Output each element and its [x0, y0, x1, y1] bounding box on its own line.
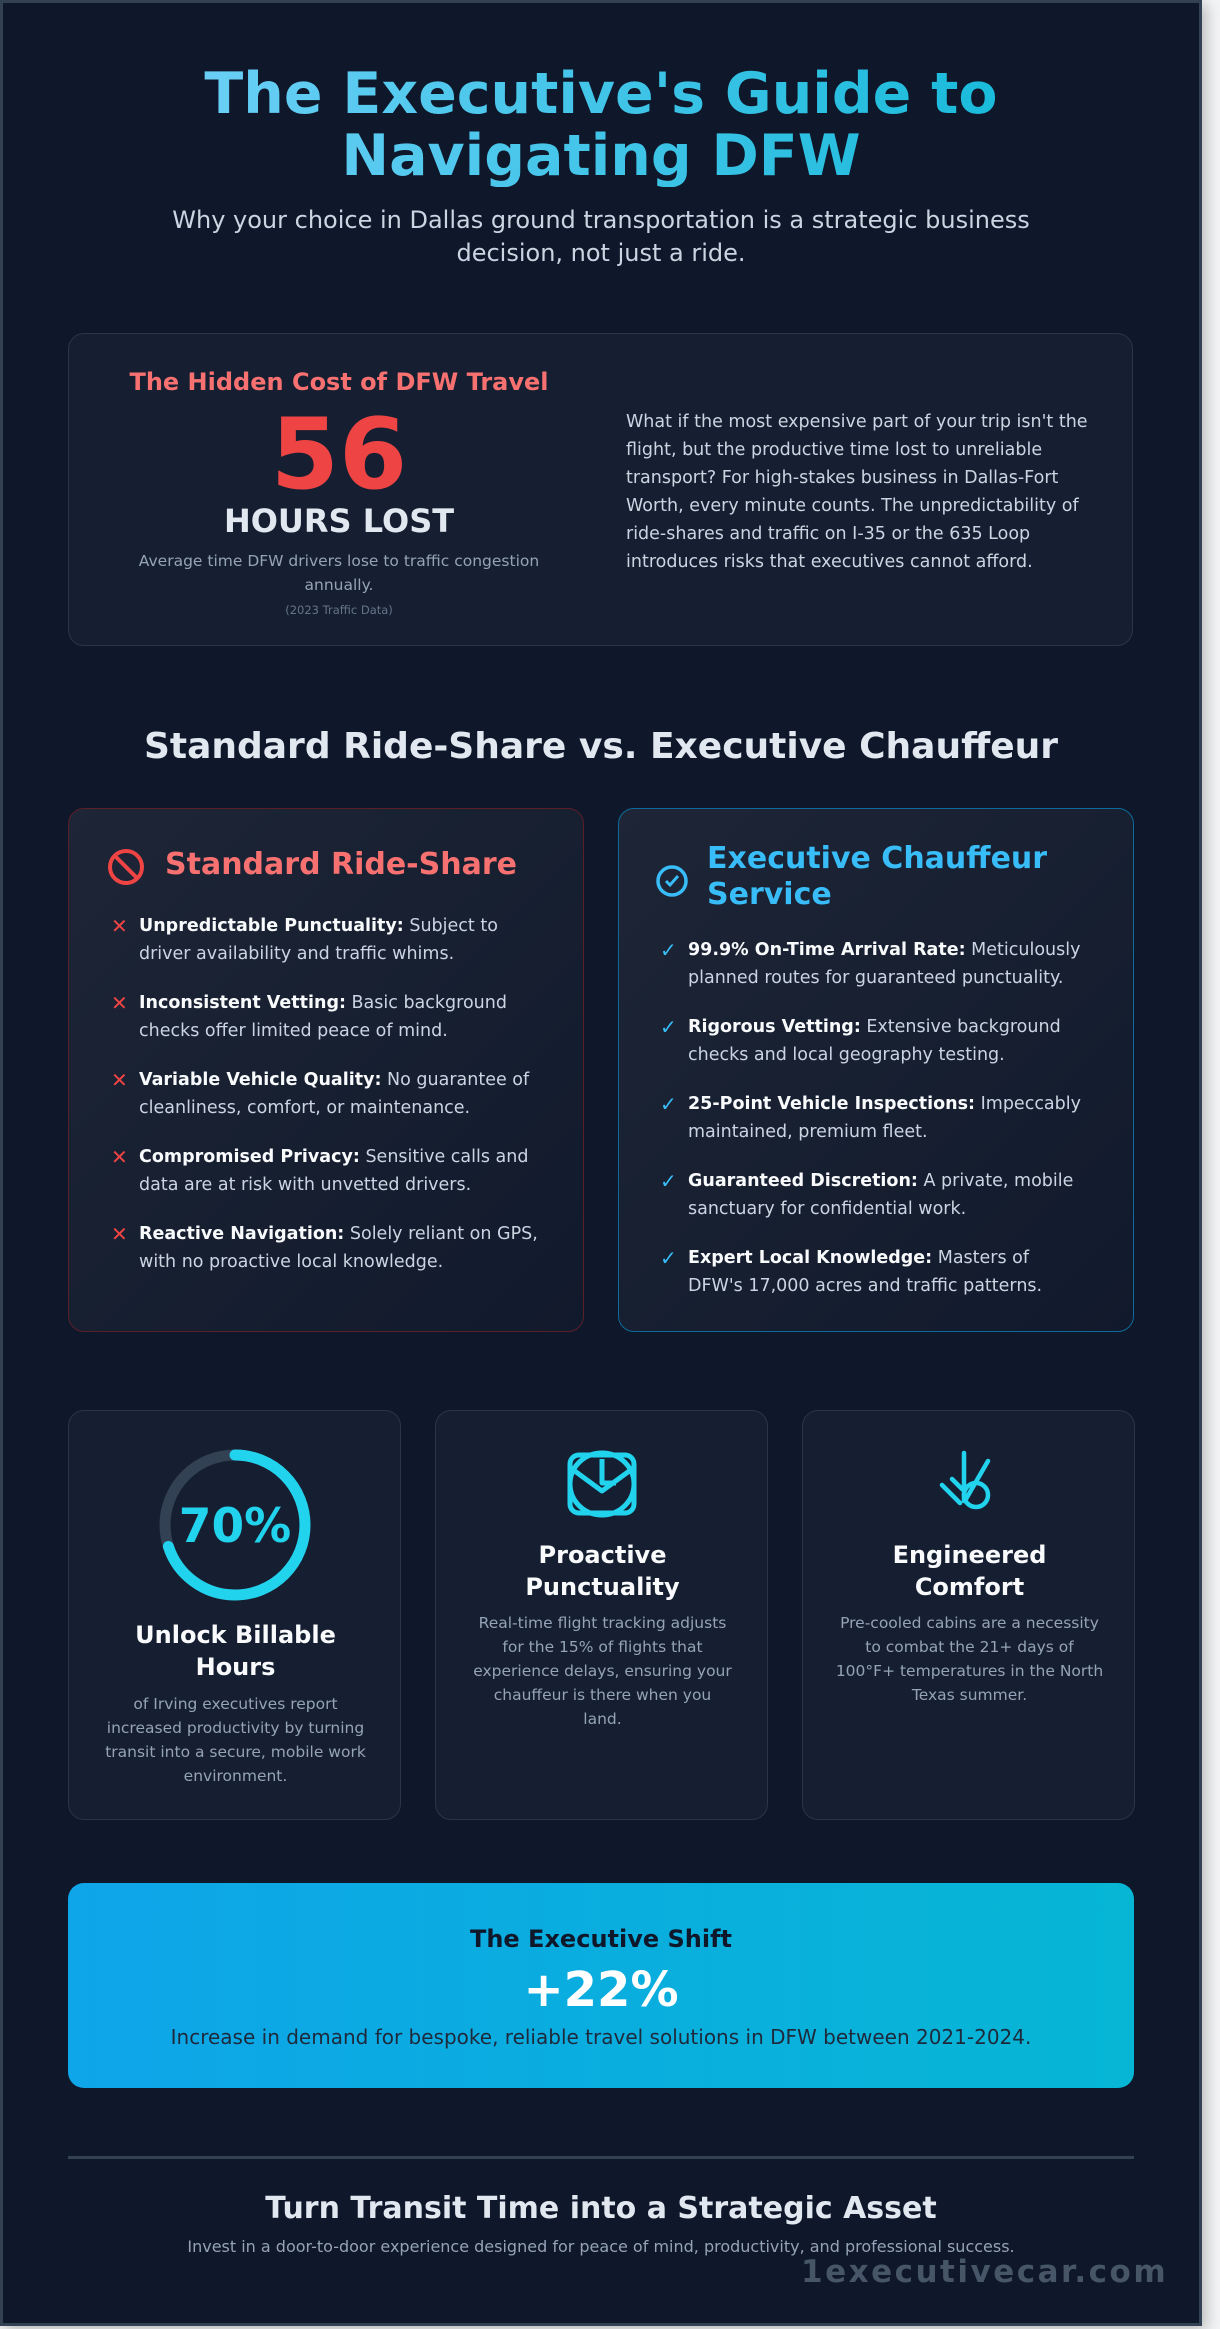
card title: Unlock Billable [135, 1621, 336, 1649]
card title: Punctuality [525, 1573, 680, 1601]
heading [707, 841, 1047, 912]
list: ride-share drawbacks: Reactive Navigation: Solely reliant on GPS, with no proactive local knowledge. [139, 1224, 538, 1272]
list: ride-share drawbacks [111, 914, 538, 1272]
banner: executive shift [68, 1883, 1134, 2088]
title: The Executive's Guide to [204, 61, 998, 127]
banner text: Increase in demand for bespoke, reliable travel solutions in DFW between 2021-2024. [171, 2025, 1031, 2049]
card title [135, 1621, 336, 1681]
list: chauffeur benefits [660, 938, 1081, 1296]
card text: of Irving executives report increased productivity by turning transit into a secure, mobile work environment. [105, 1695, 366, 1785]
heading: Standard Ride-Share [165, 847, 517, 882]
panel: executive chauffeur: ✓ [660, 1169, 677, 1193]
stat: 56: 56 [271, 398, 407, 512]
intro paragraph: What if the most expensive part of your trip isn't the flight, but the productive time lost to unreliable transport? For high-stakes business in Dallas-Fort Worth, every minute counts. The unpredictability of ride-shares and traffic on I-35 or the 635 Loop introduces risks that executives cannot afford. [626, 412, 1088, 572]
card text: Real-time flight tracking adjusts for the 15% of flights that experience delays, ensuring your chauffeur is there when you [473, 1614, 732, 1704]
chart: 70% ring: 70% [179, 1499, 291, 1554]
list: ride-share drawbacks: Compromised Privacy: Sensitive calls and data are at risk with unvetted drivers. [139, 1147, 528, 1195]
list: chauffeur benefits: Rigorous Vetting: Extensive background checks and local geography testing. [688, 1017, 1061, 1065]
caption [139, 552, 539, 617]
list: ride-share drawbacks: Variable Vehicle Quality: No guarantee of cleanliness, comfort, or maintenance. [139, 1070, 529, 1118]
list: ride-share drawbacks: Inconsistent Vetting: Basic background checks offer limited peace of mind. [139, 993, 507, 1041]
card text: land. [583, 1710, 622, 1728]
panel: executive chauffeur: ✓ [660, 1015, 677, 1039]
panel: standard ride-share: ✕ [111, 914, 128, 938]
comparison heading: Standard Ride-Share vs. Executive Chauffeur [144, 726, 1058, 767]
panel: standard ride-share: ✕ [111, 1145, 128, 1169]
icon: envelope clock [568, 1450, 636, 1518]
stat: +22%: +22% [523, 1962, 679, 2018]
subtitle: Why your choice in Dallas ground transportation is a strategic business decision, not just a ride. [172, 206, 1030, 267]
list: chauffeur benefits: Guaranteed Discretion: A private, mobile sanctuary for confidential work. [688, 1171, 1073, 1219]
card title: Hours [196, 1653, 275, 1681]
list: ride-share drawbacks: Unpredictable Punctuality: Subject to driver availability and traffic whims. [139, 916, 498, 964]
panel: executive chauffeur [618, 808, 1134, 1332]
watermark: 1executivecar.com [801, 2254, 1168, 2290]
panel: executive chauffeur: ✓ [660, 1092, 677, 1116]
hidden cost heading: The Hidden Cost of DFW Travel [129, 368, 549, 396]
card title: Engineered [893, 1541, 1046, 1569]
footer heading: Turn Transit Time into a Strategic Asset [265, 2191, 937, 2226]
panel: hidden cost [68, 333, 1133, 646]
hours lost: HOURS LOST [224, 502, 454, 540]
card text: Pre-cooled cabins are a necessity to combat the 21+ days of 100°F+ temperatures in the North Texas summer. [836, 1614, 1103, 1704]
footer text: Invest in a door-to-door experience designed for peace of mind, productivity, and professional success. [187, 2237, 1015, 2256]
list: chauffeur benefits: Expert Local Knowledge: Masters of DFW's 17,000 acres and traffic patterns. [688, 1248, 1042, 1296]
list: chauffeur benefits: 25-Point Vehicle Inspections: Impeccably maintained, premium fleet. [688, 1094, 1081, 1142]
panel: standard ride-share: ✕ [111, 1068, 128, 1092]
panel: executive chauffeur: ✓ [660, 938, 677, 962]
icon: comfort [940, 1450, 990, 1510]
title: Navigating DFW [341, 123, 861, 189]
heading: Service [707, 877, 832, 912]
icon: check circle [656, 865, 688, 897]
card: billable hours [68, 1410, 401, 1820]
chart: 70% ring [160, 1450, 310, 1600]
icon: prohibited [108, 849, 144, 885]
caption: (2023 Traffic Data) [285, 603, 393, 617]
title [3, 63, 1199, 187]
card: engineered comfort [802, 1410, 1135, 1820]
panel: standard ride-share [68, 808, 584, 1332]
card title: Comfort [915, 1573, 1024, 1601]
caption: Average time DFW drivers lose to traffic congestion annually. [139, 552, 539, 594]
card title [893, 1541, 1046, 1601]
panel: executive chauffeur: ✓ [660, 1246, 677, 1270]
banner heading: The Executive Shift [470, 1925, 732, 1953]
card title: Proactive [539, 1541, 666, 1569]
panel: standard ride-share: ✕ [111, 1222, 128, 1246]
card: proactive punctuality [435, 1410, 768, 1820]
panel: standard ride-share: ✕ [111, 991, 128, 1015]
heading: Executive Chauffeur [707, 841, 1047, 876]
list: chauffeur benefits: 99.9% On-Time Arrival Rate: Meticulously planned routes for guaranteed punctuality. [688, 940, 1080, 988]
card title [525, 1541, 680, 1601]
